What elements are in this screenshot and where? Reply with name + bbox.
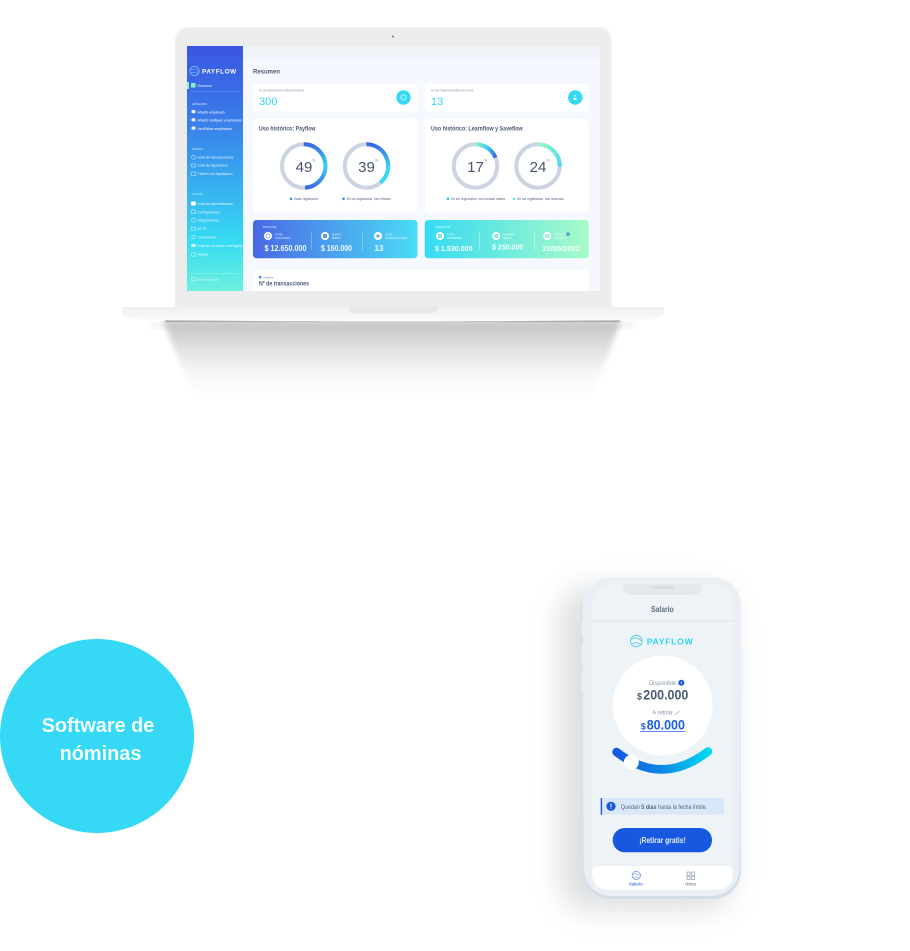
phone body [583, 577, 741, 899]
menu group: ajustes [191, 193, 244, 257]
menu group: empleados: EMPLEADOS [192, 103, 207, 106]
donut: 17% [454, 144, 497, 188]
menu group: empleados: Añadir múltiples empleados [198, 119, 242, 123]
menu group: general [192, 148, 233, 176]
legend: Payflow [290, 197, 391, 201]
badge: Software de nóminas [0, 639, 194, 833]
donut: 39%: 39 [358, 159, 375, 176]
donut: 39% [345, 144, 388, 188]
donut: 49% [282, 144, 325, 188]
nav item: salario: Salario [629, 881, 643, 886]
laptop shadow [150, 320, 636, 396]
donut: 17%: % [484, 158, 487, 162]
phone screen [592, 584, 733, 890]
panel: uso histórico Payflow [253, 119, 418, 212]
summary card: Payflow: MEDIO [332, 236, 341, 240]
donut: 17%: 17 [467, 159, 484, 176]
balance circle [613, 656, 713, 756]
withdrawal slider [616, 752, 708, 770]
balance circle: 80.000 [647, 716, 685, 732]
bottom navigation [592, 866, 733, 890]
nav item: otros [685, 872, 697, 886]
summary card: Learnflow y Saveflow: AHORRO [503, 232, 514, 236]
sidebar [187, 46, 244, 291]
donut: 24%: % [546, 158, 550, 162]
laptop lid [175, 27, 612, 307]
stat card: trabajadores [425, 84, 589, 112]
phone shadow [560, 588, 732, 910]
summary card: Payflow: PAYFLOW [263, 225, 277, 229]
stat card: trabajadores: 13 [431, 96, 443, 108]
nav item: otros: Otros [685, 881, 697, 886]
nav item: salario [629, 871, 643, 886]
stat card: empleados [253, 84, 418, 112]
badge: Software de nóminas: nóminas [60, 743, 141, 765]
summary card: Payflow: TOTAL [275, 232, 284, 236]
menu group: ajustes: Integraciones [198, 219, 219, 223]
balance circle: $ [641, 722, 646, 732]
summary card: Payflow: 13 [374, 244, 384, 253]
legend: Learnflow y Saveflow: De los registrados, han tomado clases [451, 197, 505, 201]
donut: 39%: % [375, 158, 378, 162]
legend: Learnflow y Saveflow [447, 197, 564, 201]
stat card: trabajadores: Nº DE TRABAJADORES ACTIVOS [431, 89, 473, 93]
menu item: Resumen: Resumen [198, 84, 212, 88]
summary card: Learnflow y Saveflow: TOTAL [447, 232, 456, 236]
balance circle: Disponible [649, 680, 676, 687]
laptop mockup [122, 27, 664, 396]
panel: nº de transacciones [253, 270, 589, 291]
summary card: Learnflow y Saveflow: $ 1.530.000 [435, 244, 472, 253]
phone side buttons [581, 622, 743, 692]
phone logo [630, 635, 694, 647]
summary card: Payflow [253, 220, 418, 258]
menu group: ajustes: Lista de usuarios restringidos [198, 244, 244, 248]
donut: 49%: % [312, 158, 315, 162]
dashboard screen [187, 46, 600, 291]
panel: nº de transacciones: Nº de transacciones [259, 280, 309, 288]
menu group: ajustes: Lista de administrador [198, 202, 234, 206]
badge: Software de nóminas: Software de [42, 715, 154, 737]
legend: Payflow: De los registrados, han retirado [347, 197, 391, 201]
heading: Resumen: Resumen [253, 68, 280, 76]
summary card: Learnflow y Saveflow: MEDIO [503, 236, 512, 240]
donut: 49%: 49 [296, 159, 312, 176]
stat card: empleados: Nº DE EMPLEADOS REGISTRADOS [259, 89, 304, 93]
menu group: empleados: Añadir empleado [198, 110, 225, 114]
stat card: empleados: 300 [259, 96, 277, 108]
summary card: Learnflow y Saveflow [425, 220, 589, 258]
menu group: ajustes: SFTP [198, 227, 207, 231]
legend: Payflow: Están registrados [294, 197, 318, 201]
summary card: Payflow: $ 160.000 [321, 244, 352, 253]
menu item: Resumen [187, 82, 212, 89]
donut: 24% [516, 144, 560, 188]
button: retirar gratis: ¡Retirar gratis! [639, 836, 686, 845]
panel: uso histórico Payflow: Uso histórico: Payflow [259, 126, 316, 132]
summary card: Payflow: MONTO [332, 232, 342, 236]
summary card: Payflow: TRANSACCIONES [385, 236, 408, 240]
summary card: Payflow: $ 12.650.000 [264, 244, 307, 253]
menu group: general: Fichero de liquidación [198, 172, 232, 176]
balance circle: $ [637, 692, 642, 702]
alert: días hasta fecha límite [601, 798, 724, 815]
menu group: general: GENERAL [192, 148, 204, 151]
panel: uso histórico Learnflow y Saveflow [425, 119, 589, 212]
screen title: Salario [651, 605, 674, 614]
alert: días hasta fecha límite: Quedan 5 días hasta la fecha límite. [621, 804, 707, 811]
sidebar logo: PAYFLOW [202, 68, 237, 76]
menu group: general: Lista de liquidación [198, 164, 228, 168]
laptop base [122, 307, 664, 322]
phone mockup [560, 577, 743, 910]
summary card: Learnflow y Saveflow: AHORRO [554, 236, 566, 240]
menu group: ajustes: Configuración [198, 210, 220, 214]
summary card: Learnflow y Saveflow: $ 250.000 [492, 242, 523, 252]
panel: nº de transacciones: Análisis [263, 275, 274, 279]
menu group: empleados: Ver/Editar empleados [198, 127, 232, 131]
menu group: ajustes: Ayuda [198, 253, 208, 257]
menu group: general: Lista de transacciones [198, 156, 233, 160]
summary card: Learnflow y Saveflow: 22/05/2022 [543, 244, 580, 253]
donut: 24%: 24 [530, 159, 546, 176]
summary card: Payflow: Nº DE [385, 232, 392, 236]
legend: Learnflow y Saveflow: De los registrados, han ahorrado [517, 197, 564, 201]
phone logo: PAYFLOW [647, 637, 694, 647]
sidebar logo [190, 66, 237, 76]
menu group: empleados [192, 103, 242, 131]
summary card: Learnflow y Saveflow: FECHA DE [554, 232, 568, 236]
summary card: Learnflow y Saveflow: AHORRADO [447, 236, 462, 240]
menu group: ajustes: Contraseña [198, 235, 216, 239]
summary card: Payflow: SOLICITADO [275, 236, 291, 240]
balance circle: 200.000 [643, 686, 688, 702]
balance circle: A retirar [652, 710, 673, 716]
panel: uso histórico Learnflow y Saveflow: Uso histórico: Learnflow y Saveflow [431, 126, 523, 132]
menu item: cerrar sesión: Cerrar sesión [198, 278, 219, 282]
menu group: ajustes: AJUSTES [192, 193, 203, 196]
summary card: Learnflow y Saveflow: SAVEFLOW [435, 225, 451, 229]
button: retirar gratis [613, 828, 712, 852]
